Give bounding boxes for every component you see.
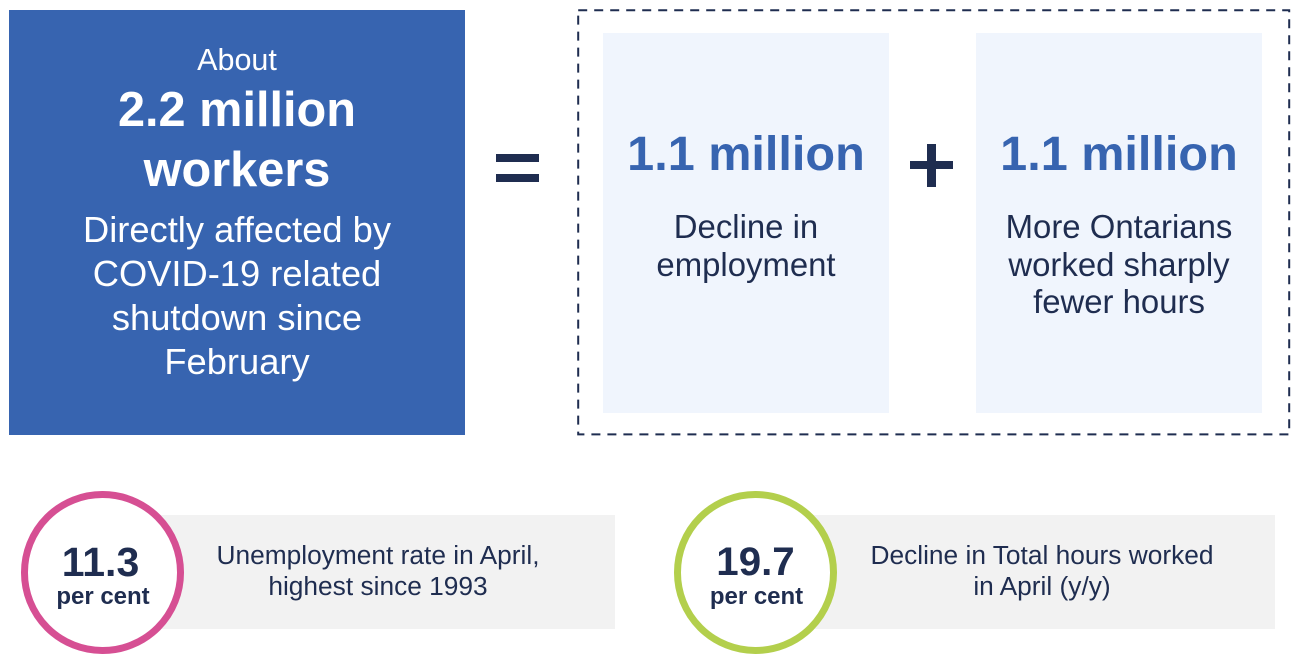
panel: unemployment rate — [21, 491, 615, 654]
heading: 2.2 million workers: workers — [144, 143, 330, 197]
figure: 11.3: 11.3 — [62, 539, 139, 585]
text: unemployment description: highest since 1993 — [268, 571, 488, 601]
panel: total hours — [674, 491, 1275, 654]
icon: plus sign — [910, 144, 953, 187]
panel: dashed container — [577, 9, 1290, 436]
bar: grey background — [101, 515, 615, 629]
text: directly affected: COVID-19 related — [93, 253, 381, 294]
heading: 2.2 million workers — [118, 83, 356, 197]
text: per cent: per cent — [56, 583, 150, 610]
text: more Ontarians: More Ontarians — [1006, 208, 1232, 245]
text: more Ontarians: fewer hours — [1033, 283, 1205, 320]
text: unemployment description: Unemployment rate in April, — [216, 540, 540, 570]
text: directly affected: shutdown since — [112, 297, 362, 338]
text: directly affected: February — [164, 341, 310, 382]
panel: 2.2 million workers — [9, 10, 465, 435]
badge: 11.3 per cent — [21, 491, 184, 654]
icon: equals sign — [496, 154, 539, 182]
text: about: About — [197, 43, 277, 77]
bar: grey background — [754, 515, 1275, 629]
text: directly affected: Directly affected by — [83, 209, 391, 250]
text: more Ontarians: worked sharply — [1008, 246, 1230, 282]
badge: 19.7 per cent — [674, 491, 836, 654]
heading: 2.2 million workers: 2.2 million — [118, 83, 356, 137]
figure: 19.7: 19.7 — [716, 539, 795, 584]
text: more Ontarians — [1006, 208, 1232, 320]
panel: decline in employment — [603, 32, 889, 412]
dashed border — [577, 9, 1290, 436]
text: directly affected — [83, 209, 391, 382]
figure: 1.1 million: 1.1 million — [627, 127, 865, 181]
text: decline in employment: employment — [656, 246, 836, 282]
text: decline in employment — [656, 208, 836, 283]
text: hours description: in April (y/y) — [973, 571, 1111, 601]
text: hours description — [870, 540, 1214, 601]
panel: fewer hours — [976, 32, 1262, 412]
figure: 1.1 million: 1.1 million — [1000, 127, 1238, 181]
text: hours description: Decline in Total hours worked — [870, 540, 1214, 570]
text: decline in employment: Decline in — [674, 208, 818, 245]
text: unemployment description — [216, 540, 540, 601]
text: per cent: per cent — [710, 583, 803, 610]
